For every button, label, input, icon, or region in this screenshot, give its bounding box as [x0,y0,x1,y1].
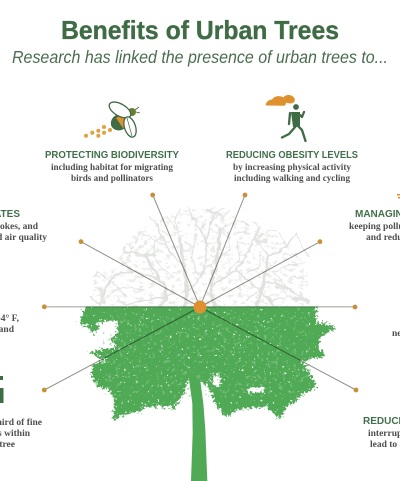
panel: left lower cropped text [0,376,42,450]
spokes [44,195,356,390]
center hub [194,300,206,314]
canopy clearings [101,321,263,417]
trunk [189,377,207,481]
canopy [79,303,337,420]
panel: right lower cropped text [363,416,400,450]
icon: runner [282,104,306,141]
tree illustration [79,207,337,481]
panel: protecting biodiversity: birds and pollinators [71,174,153,184]
panel: left middle cropped text [0,313,20,335]
panel: reducing obesity levels [226,150,358,184]
title: Benefits of Urban Trees [61,15,339,45]
panel: protecting biodiversity [45,150,179,184]
canopy speckle [103,313,310,397]
panel: right upper cropped text [349,194,400,243]
panel: reducing obesity levels: by increasing physical activity [233,163,351,173]
spoke end dots [42,193,358,392]
icon: cloud [266,95,295,106]
panel: protecting biodiversity: including habitat for migrating [51,163,173,173]
icon: bee [84,99,140,139]
panel: reducing obesity levels: including walking and cycling [234,174,350,184]
panel: left upper cropped text [0,209,47,243]
panel: reducing obesity levels: REDUCING OBESITY LEVELS [226,150,358,161]
canopy foliage [79,303,337,420]
panel: protecting biodiversity: PROTECTING BIODIVERSITY [45,150,179,161]
upper branches [90,207,312,307]
